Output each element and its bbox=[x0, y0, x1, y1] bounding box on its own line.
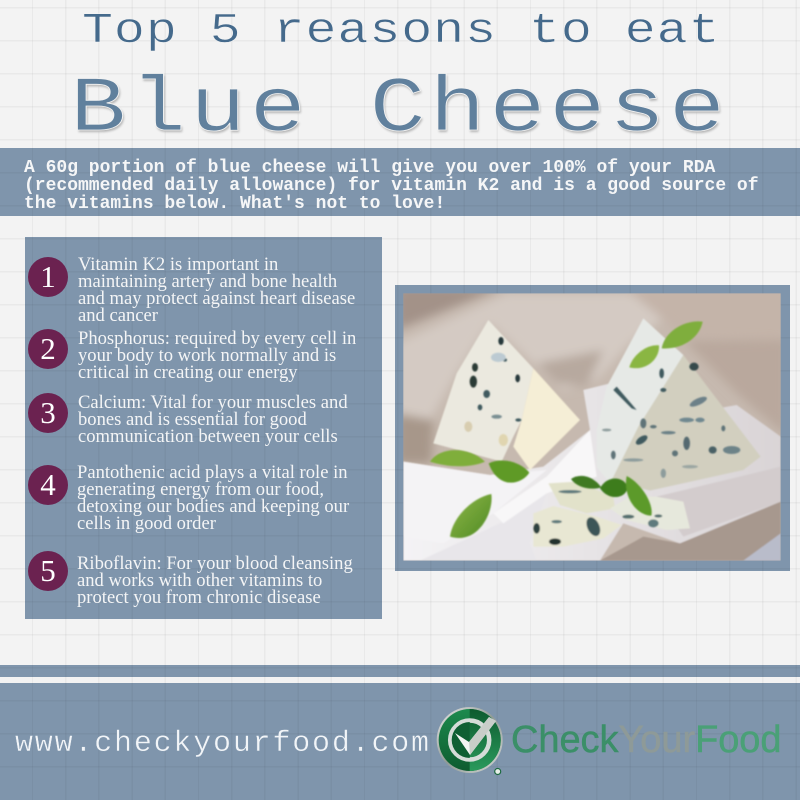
left wedge bbox=[433, 320, 533, 462]
reason 3 text: Calcium: Vital for your muscles and bones and is essential for good communication between your cells bbox=[78, 392, 348, 447]
number badge 2 bbox=[28, 329, 68, 369]
crumbs bbox=[533, 482, 690, 547]
number badge 4: 4 bbox=[40, 467, 56, 502]
number badge 5 bbox=[28, 551, 68, 591]
panel: footer strip bbox=[0, 665, 800, 677]
panel: footer bbox=[0, 683, 800, 800]
number badge 1 bbox=[28, 257, 68, 297]
title: Blue Cheese: Blue Cheese bbox=[70, 66, 729, 154]
panel: intro band bbox=[0, 148, 800, 216]
number badge 3: 3 bbox=[40, 395, 56, 430]
number badge 3 bbox=[28, 393, 68, 433]
number badge 2: 2 bbox=[40, 331, 56, 366]
right wedge bbox=[610, 355, 761, 491]
panel: reasons list bbox=[25, 237, 382, 619]
intro text: A 60g portion of blue cheese will give you over 100% of your RDA (recommended daily allowance) for vitamin K2 and is a good source of the vitamins below. What's not to love! bbox=[24, 158, 759, 214]
photo: blue cheese wedges on cloth bbox=[403, 293, 781, 561]
reason 4 text: Pantothenic acid plays a vital role in generating energy from our food, detoxing our bodies and keeping our cells in good order bbox=[77, 462, 349, 534]
number badge 1: 1 bbox=[40, 259, 56, 294]
reason 5 text: Riboflavin: For your blood cleansing and works with other vitamins to protect you from chronic disease bbox=[77, 553, 353, 608]
footer url: www.checkyourfood.com bbox=[15, 727, 431, 761]
number badge 4 bbox=[28, 465, 68, 505]
icon: check logo badge bbox=[436, 707, 503, 776]
reason 2 text: Phosphorus: required by every cell in your body to work normally and is critical in creating our energy bbox=[78, 328, 356, 383]
title: top line: Top 5 reasons to eat bbox=[82, 6, 720, 55]
logo wordmark: CheckYourFood bbox=[511, 719, 781, 761]
number badge 5: 5 bbox=[40, 553, 56, 588]
leaves bbox=[430, 321, 703, 538]
reason 1 text: Vitamin K2 is important in maintaining artery and bone health and may protect against heart disease and cancer bbox=[78, 254, 355, 326]
panel: photo frame bbox=[395, 285, 790, 571]
